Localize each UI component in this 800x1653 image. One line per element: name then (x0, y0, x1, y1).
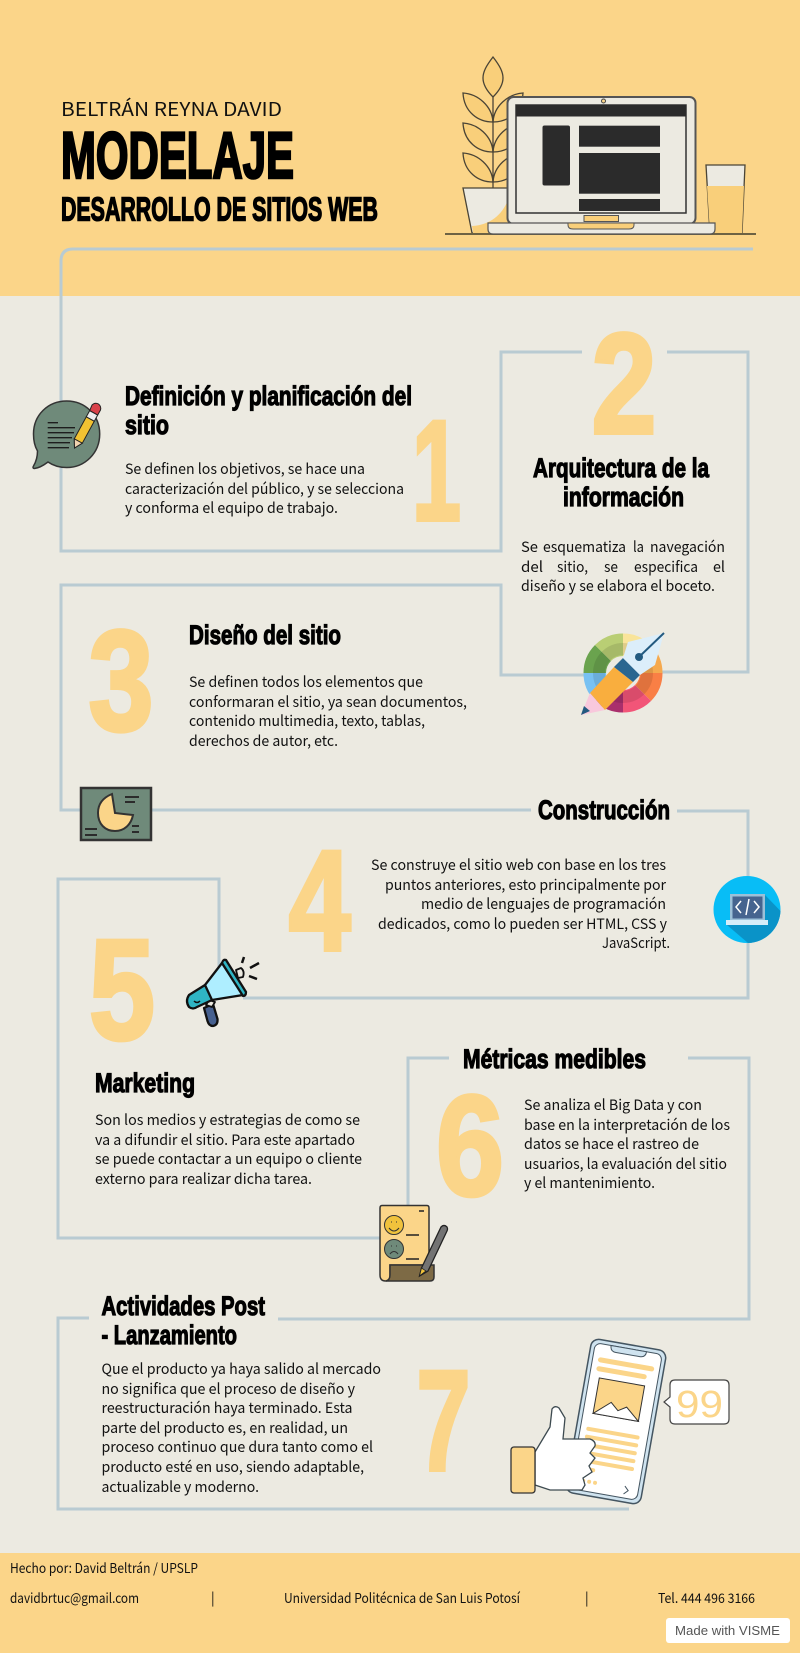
main title: MODELAJE (61, 118, 294, 192)
icon: survey sheet with faces and pen (380, 1206, 448, 1281)
heading: Arquitectura de la (533, 453, 710, 483)
footer band (0, 1553, 800, 1653)
body text (125, 458, 404, 518)
laptop (488, 97, 715, 234)
body text (521, 536, 725, 596)
step 1: definition and planning (33, 381, 461, 551)
quote bubble with 99 (664, 1380, 729, 1426)
body text (102, 1358, 381, 1497)
body text: Son los medios y estrategias de como se (95, 1109, 360, 1130)
body text: se (604, 556, 618, 577)
number 7: 7 (416, 1342, 470, 1501)
glass (706, 165, 745, 233)
body text: producto esté en uso, siendo adaptable, (102, 1456, 364, 1477)
heading: Construcción (538, 795, 670, 825)
heading: Definición y planificación del (125, 381, 412, 411)
body text: Que el producto ya haya salido al mercado (102, 1358, 381, 1379)
phone number: Tel. 444 496 3166 (658, 1587, 755, 1607)
body text: datos se hace el rastreo de (524, 1133, 699, 1154)
body text: JavaScript. (602, 932, 670, 953)
shelf line (445, 233, 756, 235)
body text: y el mantenimiento. (524, 1172, 655, 1193)
body text: parte del producto es, en realidad, un (102, 1417, 348, 1438)
body text: el (713, 556, 725, 577)
step 5: marketing (89, 911, 362, 1189)
body text: no significa que el proceso de diseño y (102, 1378, 355, 1399)
number 5: 5 (89, 911, 155, 1070)
body text: reestructuración haya terminado. Esta (102, 1397, 352, 1418)
cuff (511, 1447, 535, 1493)
author credit: Hecho por: David Beltrán / UPSLP (10, 1557, 198, 1577)
body text: Se definen los objetivos, se hace una (125, 458, 365, 479)
body text: externo para realizar dicha tarea. (95, 1168, 312, 1189)
number 4: 4 (289, 822, 351, 981)
connector lines framing the steps (58, 249, 753, 1509)
heading: Métricas medibles (463, 1044, 646, 1074)
icon: megaphone (187, 957, 259, 1026)
number 6: 6 (436, 1067, 504, 1226)
number 1: 1 (412, 392, 461, 551)
icon: pie chart board (81, 788, 151, 840)
phone (565, 1338, 667, 1505)
body text: Se definen todos los elementos que (189, 671, 423, 692)
heading (533, 453, 710, 512)
body text: derechos de autor, etc. (189, 730, 338, 751)
body text: actualizable y moderno. (102, 1476, 259, 1497)
plant (463, 57, 523, 188)
body text: del (521, 556, 543, 577)
quote bubble with 99: 99 (676, 1384, 723, 1426)
body text: proceso continuo que dura tanto como el (102, 1436, 373, 1457)
university: Universidad Politécnica de San Luis Potosí (284, 1587, 521, 1607)
step 2: information architecture (521, 305, 725, 715)
header band (0, 0, 800, 296)
body text (524, 1094, 730, 1193)
body text: va a difundir el sitio. Para este apartado (95, 1129, 355, 1150)
icon: speech bubble with pencil (33, 401, 101, 468)
step 7: post-launch activities (102, 1291, 729, 1505)
heading: Actividades Post (102, 1291, 265, 1321)
footer credits (10, 1557, 790, 1643)
body text: usuarios, la evaluación del sitio (524, 1153, 727, 1174)
body text: esquematiza (543, 536, 626, 557)
step 6: measurable metrics (380, 1044, 730, 1281)
pot (463, 188, 508, 233)
author name: BELTRÁN REYNA DAVID (61, 95, 282, 122)
body text (371, 854, 670, 953)
email: davidbrtuc@gmail.com (10, 1587, 139, 1607)
body text: Se analiza el Big Data y con (524, 1094, 702, 1115)
number 2: 2 (592, 305, 656, 464)
body text: Se (521, 536, 538, 557)
hand (535, 1407, 595, 1490)
heading: - Lanzamiento (102, 1320, 237, 1350)
body text: sitio, (557, 556, 588, 577)
made with badge (666, 1618, 790, 1643)
body text: contenido multimedia, texto, tablas, (189, 710, 425, 731)
icon: laptop with code symbol (714, 876, 780, 943)
body text: puntos anteriores, esto principalmente por (385, 874, 666, 895)
body text: diseño y se elabora el boceto. (521, 575, 715, 596)
heading: sitio (125, 410, 169, 440)
title block (61, 95, 378, 228)
step 4: construction (289, 795, 780, 981)
body text (189, 671, 467, 751)
heading (125, 381, 412, 440)
body text: medio de lenguajes de programación (421, 893, 666, 914)
body text: base en la interpretación de los (524, 1114, 730, 1135)
separator: | (211, 1587, 215, 1607)
body text: Se construye el sitio web con base en los tres (371, 854, 666, 875)
illustration: laptop, plant and glass on a shelf (445, 57, 756, 234)
heading: información (563, 482, 684, 512)
body text (95, 1109, 362, 1189)
heading: Marketing (95, 1068, 195, 1098)
heading: Diseño del sitio (189, 620, 341, 650)
body text: caracterización del público, y se selecciona (125, 478, 404, 499)
body text: dedicados, como lo pueden ser HTML, CSS y (378, 913, 667, 934)
body text: y conforma el equipo de trabajo. (125, 497, 338, 518)
body text: se puede contactar a un equipo o cliente (95, 1148, 362, 1169)
subtitle: DESARROLLO DE SITIOS WEB (61, 190, 378, 228)
illustration: hand giving a thumbs up to a phone (511, 1338, 729, 1505)
separator: | (585, 1587, 589, 1607)
body text: la (633, 536, 644, 557)
heading (102, 1291, 265, 1350)
icon: colour wheel with pencil and pen nib (581, 633, 664, 715)
body text: especifica (634, 556, 698, 577)
number 3: 3 (88, 602, 154, 761)
made with badge: Made with VISME (675, 1623, 780, 1638)
body text: conformaran el sitio, ya sean documentos, (189, 691, 467, 712)
body text: navegación (650, 536, 725, 557)
step 3: site design (81, 602, 467, 840)
